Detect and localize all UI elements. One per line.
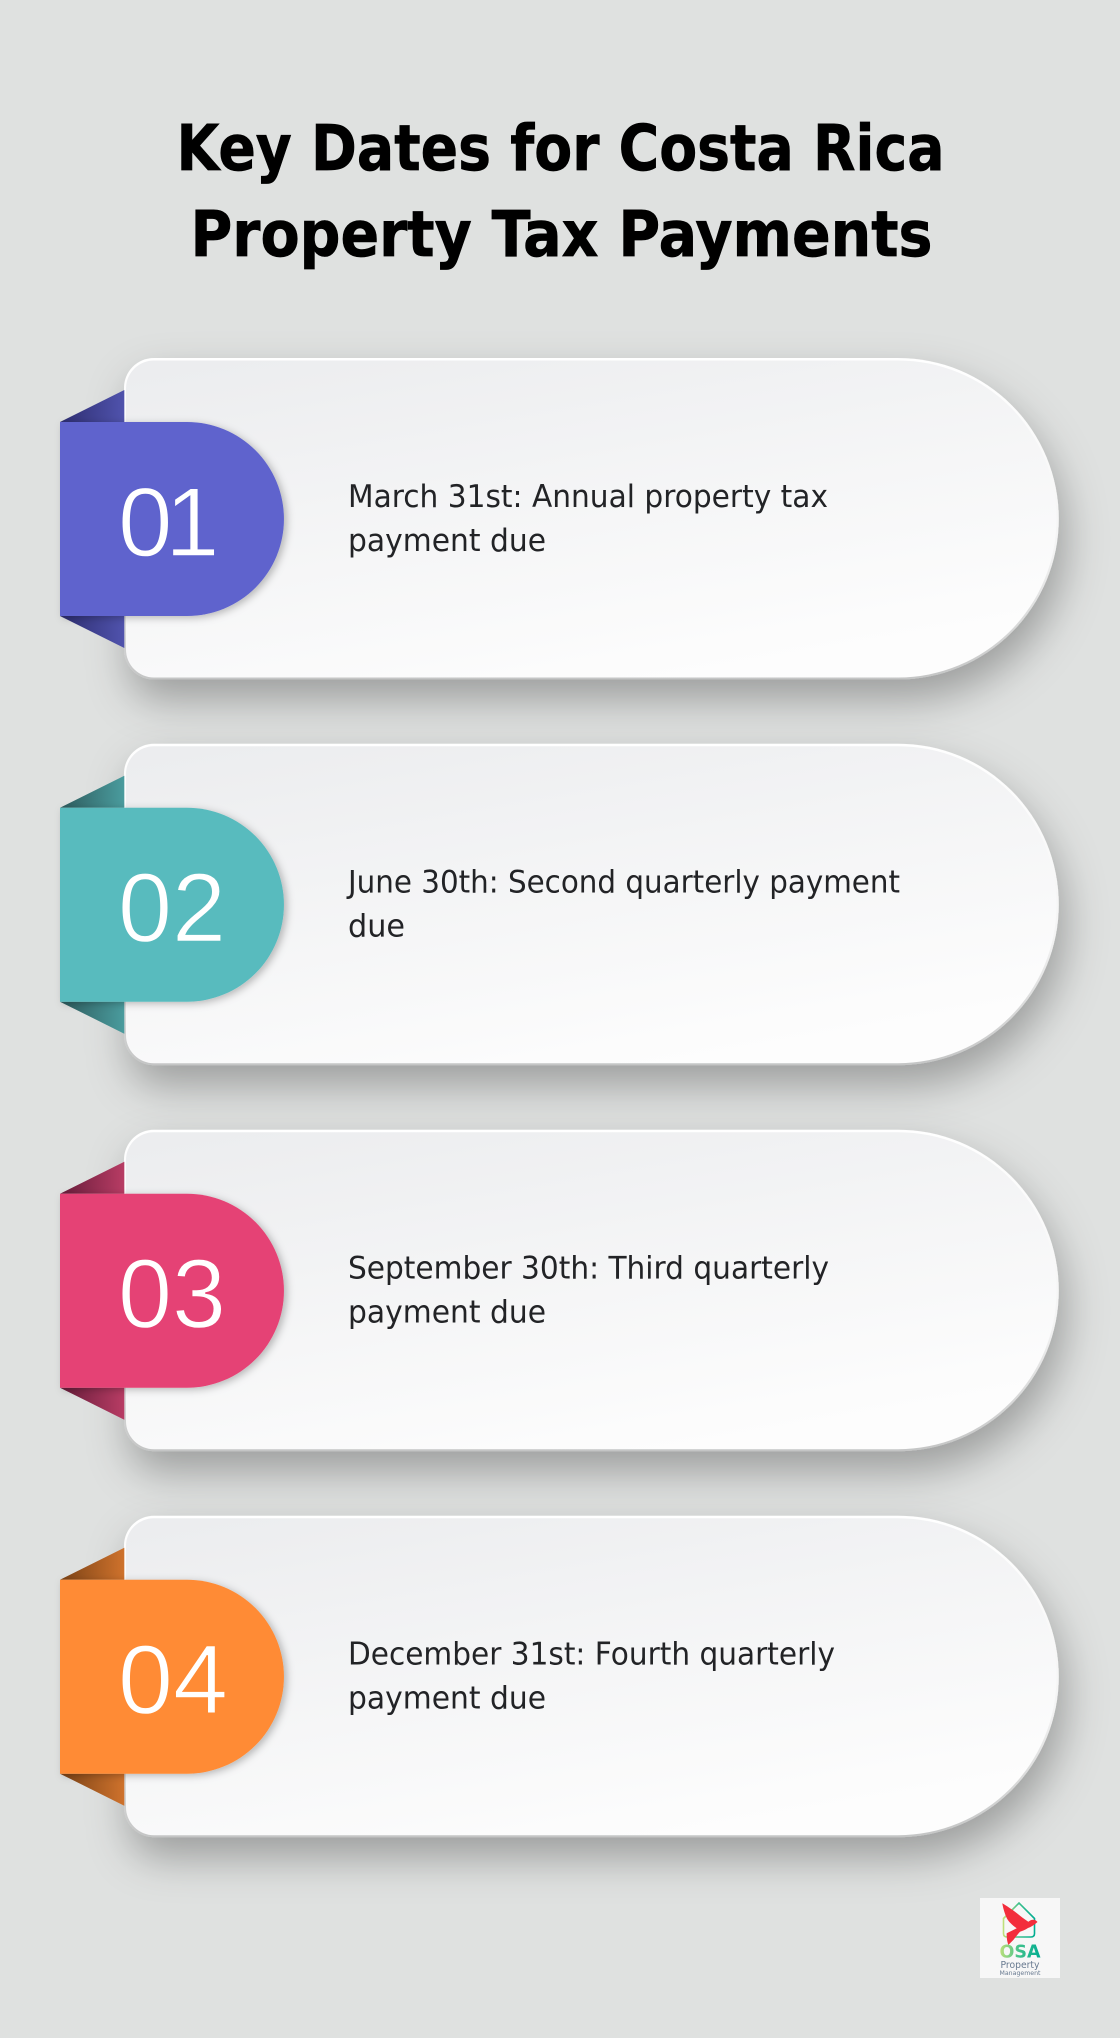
- panel: step 01: [60, 358, 1059, 680]
- text 02: June 30th: Second quarterly payment: [346, 865, 900, 901]
- fold wedges 01: [60, 390, 124, 648]
- panel: step 03: [60, 1130, 1059, 1451]
- text 04: payment due: [348, 1681, 546, 1717]
- text 02: due: [348, 909, 405, 945]
- number 01: 01: [118, 467, 220, 577]
- icon: house outline: [1004, 1903, 1034, 1937]
- number badge 03: [60, 1194, 284, 1388]
- text 04: December 31st: Fourth quarterly: [348, 1637, 835, 1673]
- panel: step 04: [60, 1516, 1059, 1837]
- title: Key Dates for Costa Rica: [176, 111, 944, 185]
- text 04: [348, 1637, 835, 1717]
- text 03: payment due: [348, 1295, 546, 1331]
- text 01: [348, 479, 828, 559]
- logo wordmark OSA: OSA: [1000, 1942, 1041, 1962]
- text 03: [348, 1251, 829, 1331]
- icon: red bird: [1002, 1903, 1038, 1945]
- number badge 04: [60, 1580, 284, 1774]
- text 01: March 31st: Annual property tax: [348, 479, 828, 515]
- text 01: payment due: [348, 523, 546, 559]
- number 02: 02: [118, 853, 226, 963]
- card 01: [124, 358, 1059, 680]
- number badge 02: [60, 808, 284, 1002]
- number 03: 03: [118, 1239, 226, 1349]
- logo text Property: Property: [1000, 1960, 1040, 1971]
- fold wedges 03: [60, 1162, 124, 1420]
- fold wedges 02: [60, 776, 124, 1034]
- logo text Management: Management: [1000, 1970, 1041, 1977]
- card 02: [124, 744, 1059, 1065]
- card 04: [124, 1516, 1059, 1837]
- fold wedges 04: [60, 1548, 124, 1806]
- panel: step 02: [60, 744, 1059, 1065]
- number badge 01: [60, 422, 284, 616]
- card 03: [124, 1130, 1059, 1451]
- number 04: 04: [118, 1625, 228, 1735]
- text 03: September 30th: Third quarterly: [348, 1251, 829, 1287]
- text 02: [346, 865, 900, 945]
- title: [176, 111, 944, 271]
- title: Property Tax Payments: [190, 197, 932, 271]
- logo: OSA Property Management: [980, 1898, 1060, 1978]
